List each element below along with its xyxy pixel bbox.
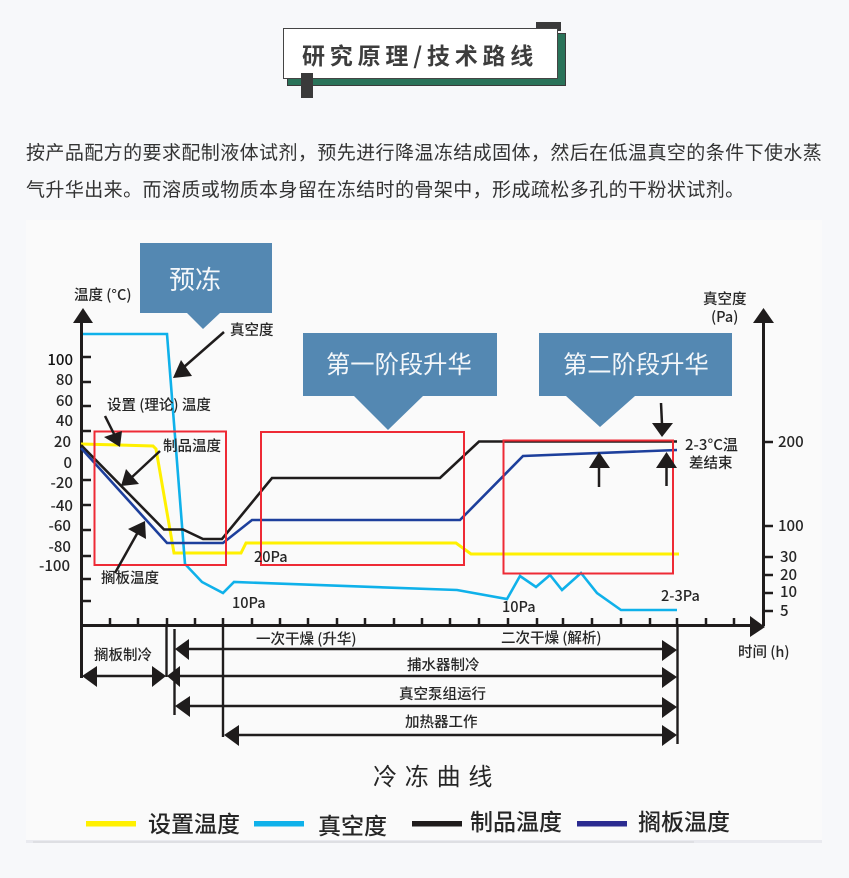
right axis numbers: 5	[780, 600, 789, 621]
right axis numbers: 20	[780, 564, 797, 585]
curve: set temperature	[81, 444, 679, 554]
callout: pre-freeze: 预冻	[169, 260, 221, 297]
time axis	[80, 616, 765, 637]
callout: first stage sublimation	[303, 333, 497, 430]
left axis numbers: 80	[56, 369, 73, 390]
left axis numbers: -40	[51, 495, 73, 516]
curve: vacuum	[83, 334, 677, 610]
legend: set temperature	[86, 805, 240, 839]
chart title: 冷冻曲线	[373, 757, 500, 792]
left axis numbers: 0	[63, 452, 72, 473]
left axis numbers: 40	[56, 410, 73, 431]
left axis numbers: -80	[49, 536, 71, 557]
span: primary drying: 一次干燥 (升华)	[256, 628, 357, 649]
right axis numbers: 10	[780, 581, 797, 602]
pressure labels: 10Pa	[232, 592, 266, 613]
red box: pre-freeze stage	[94, 432, 226, 565]
pressure labels	[232, 546, 700, 617]
right vacuum axis	[753, 308, 774, 626]
panel bottom edge	[26, 840, 822, 843]
span: cold trap cooling	[167, 654, 677, 688]
legend: shelf temperature	[577, 803, 730, 837]
legend: vacuum	[254, 807, 387, 841]
banner white plate	[283, 28, 558, 79]
curve: shelf temperature	[81, 448, 677, 543]
arrow: up to shelf temperature 1	[589, 452, 610, 487]
pressure labels: 2-3Pa	[661, 585, 700, 606]
pressure labels: 20Pa	[254, 546, 288, 567]
left axis title: 温度 (°C)	[74, 284, 132, 305]
banner title text: 研究原理/技术路线	[302, 37, 538, 71]
span: heater working	[224, 711, 677, 746]
left axis numbers: -100	[39, 555, 70, 576]
annotation: set temperature arrow: 设置 (理论) 温度	[107, 394, 211, 415]
intro paragraph	[26, 138, 822, 202]
left temperature axis	[73, 308, 93, 678]
panel bottom edge shadow	[33, 841, 694, 843]
left axis numbers: 100	[47, 349, 73, 370]
left axis numbers: 20	[54, 431, 71, 452]
banner dark corner top right	[536, 22, 561, 31]
span: primary drying: 二次干燥 (解析)	[501, 627, 602, 648]
span: cold trap cooling: 捕水器制冷	[407, 654, 480, 675]
right axis numbers	[778, 431, 804, 621]
legend: product temperature: 制品温度	[470, 803, 562, 837]
annotation: set temperature arrow	[104, 394, 211, 447]
phase guide lines	[166, 625, 678, 744]
span: heater working: 加热器工作	[405, 711, 478, 732]
span: shelf cooling	[82, 644, 166, 687]
span: vacuum pump running: 真空泵组运行	[399, 683, 486, 704]
legend: shelf temperature: 搁板温度	[638, 803, 730, 837]
legend: product temperature	[412, 803, 562, 837]
right axis title: (Pa)	[711, 306, 738, 327]
heading: research principle banner	[283, 22, 566, 98]
intro paragraph: 气升华出来。而溶质或物质本身留在冻结时的骨架中，形成疏松多孔的干粉状试剂。	[26, 175, 745, 202]
annotation: end condition: 差结束	[689, 452, 733, 473]
span: vacuum pump running	[175, 683, 677, 718]
callout: second stage sublimation	[539, 333, 732, 427]
annotation: end condition	[685, 434, 738, 473]
callout: first stage sublimation: 第一阶段升华	[326, 345, 472, 380]
annotation: vacuum arrow	[173, 319, 274, 378]
annotation: product temperature arrow: 制品温度	[163, 435, 221, 456]
arrow: down to product temperature	[652, 403, 673, 437]
red box: second stage	[504, 440, 673, 574]
banner dark tab bottom left	[301, 73, 313, 98]
callout: pre-freeze	[140, 243, 272, 329]
right axis numbers: 100	[778, 515, 804, 536]
annotation: shelf temperature arrow: 搁板温度	[101, 567, 159, 588]
span: primary drying	[175, 627, 677, 661]
legend: vacuum: 真空度	[318, 807, 387, 841]
annotation: vacuum arrow: 真空度	[230, 319, 274, 340]
left axis numbers: 60	[56, 390, 73, 411]
annotation: end condition: 2-3°C温	[685, 434, 738, 455]
right axis numbers: 30	[780, 546, 797, 567]
right axis numbers: 200	[778, 431, 804, 452]
left axis numbers: -60	[49, 515, 71, 536]
banner green shadow	[287, 33, 566, 86]
annotation: product temperature arrow	[121, 435, 221, 486]
arrow: up to shelf temperature 2	[656, 452, 677, 486]
legend	[86, 803, 730, 841]
panel: freeze-drying chart background	[26, 220, 822, 841]
right axis title	[703, 288, 746, 327]
annotation: shelf temperature arrow	[101, 521, 159, 588]
intro paragraph: 按产品配方的要求配制液体试剂，预先进行降温冻结成固体，然后在低温真空的条件下使水蒸	[26, 138, 822, 165]
left axis numbers: -20	[51, 472, 73, 493]
callout: second stage sublimation: 第二阶段升华	[563, 345, 709, 380]
right axis title: 真空度	[703, 288, 746, 309]
left axis numbers	[39, 349, 73, 576]
curve: product temperature	[81, 442, 677, 539]
legend: set temperature: 设置温度	[148, 805, 240, 839]
red box: first stage	[261, 432, 464, 565]
span: shelf cooling: 搁板制冷	[94, 644, 152, 665]
time axis title: 时间 (h)	[738, 641, 790, 662]
pressure labels: 10Pa	[502, 596, 536, 617]
